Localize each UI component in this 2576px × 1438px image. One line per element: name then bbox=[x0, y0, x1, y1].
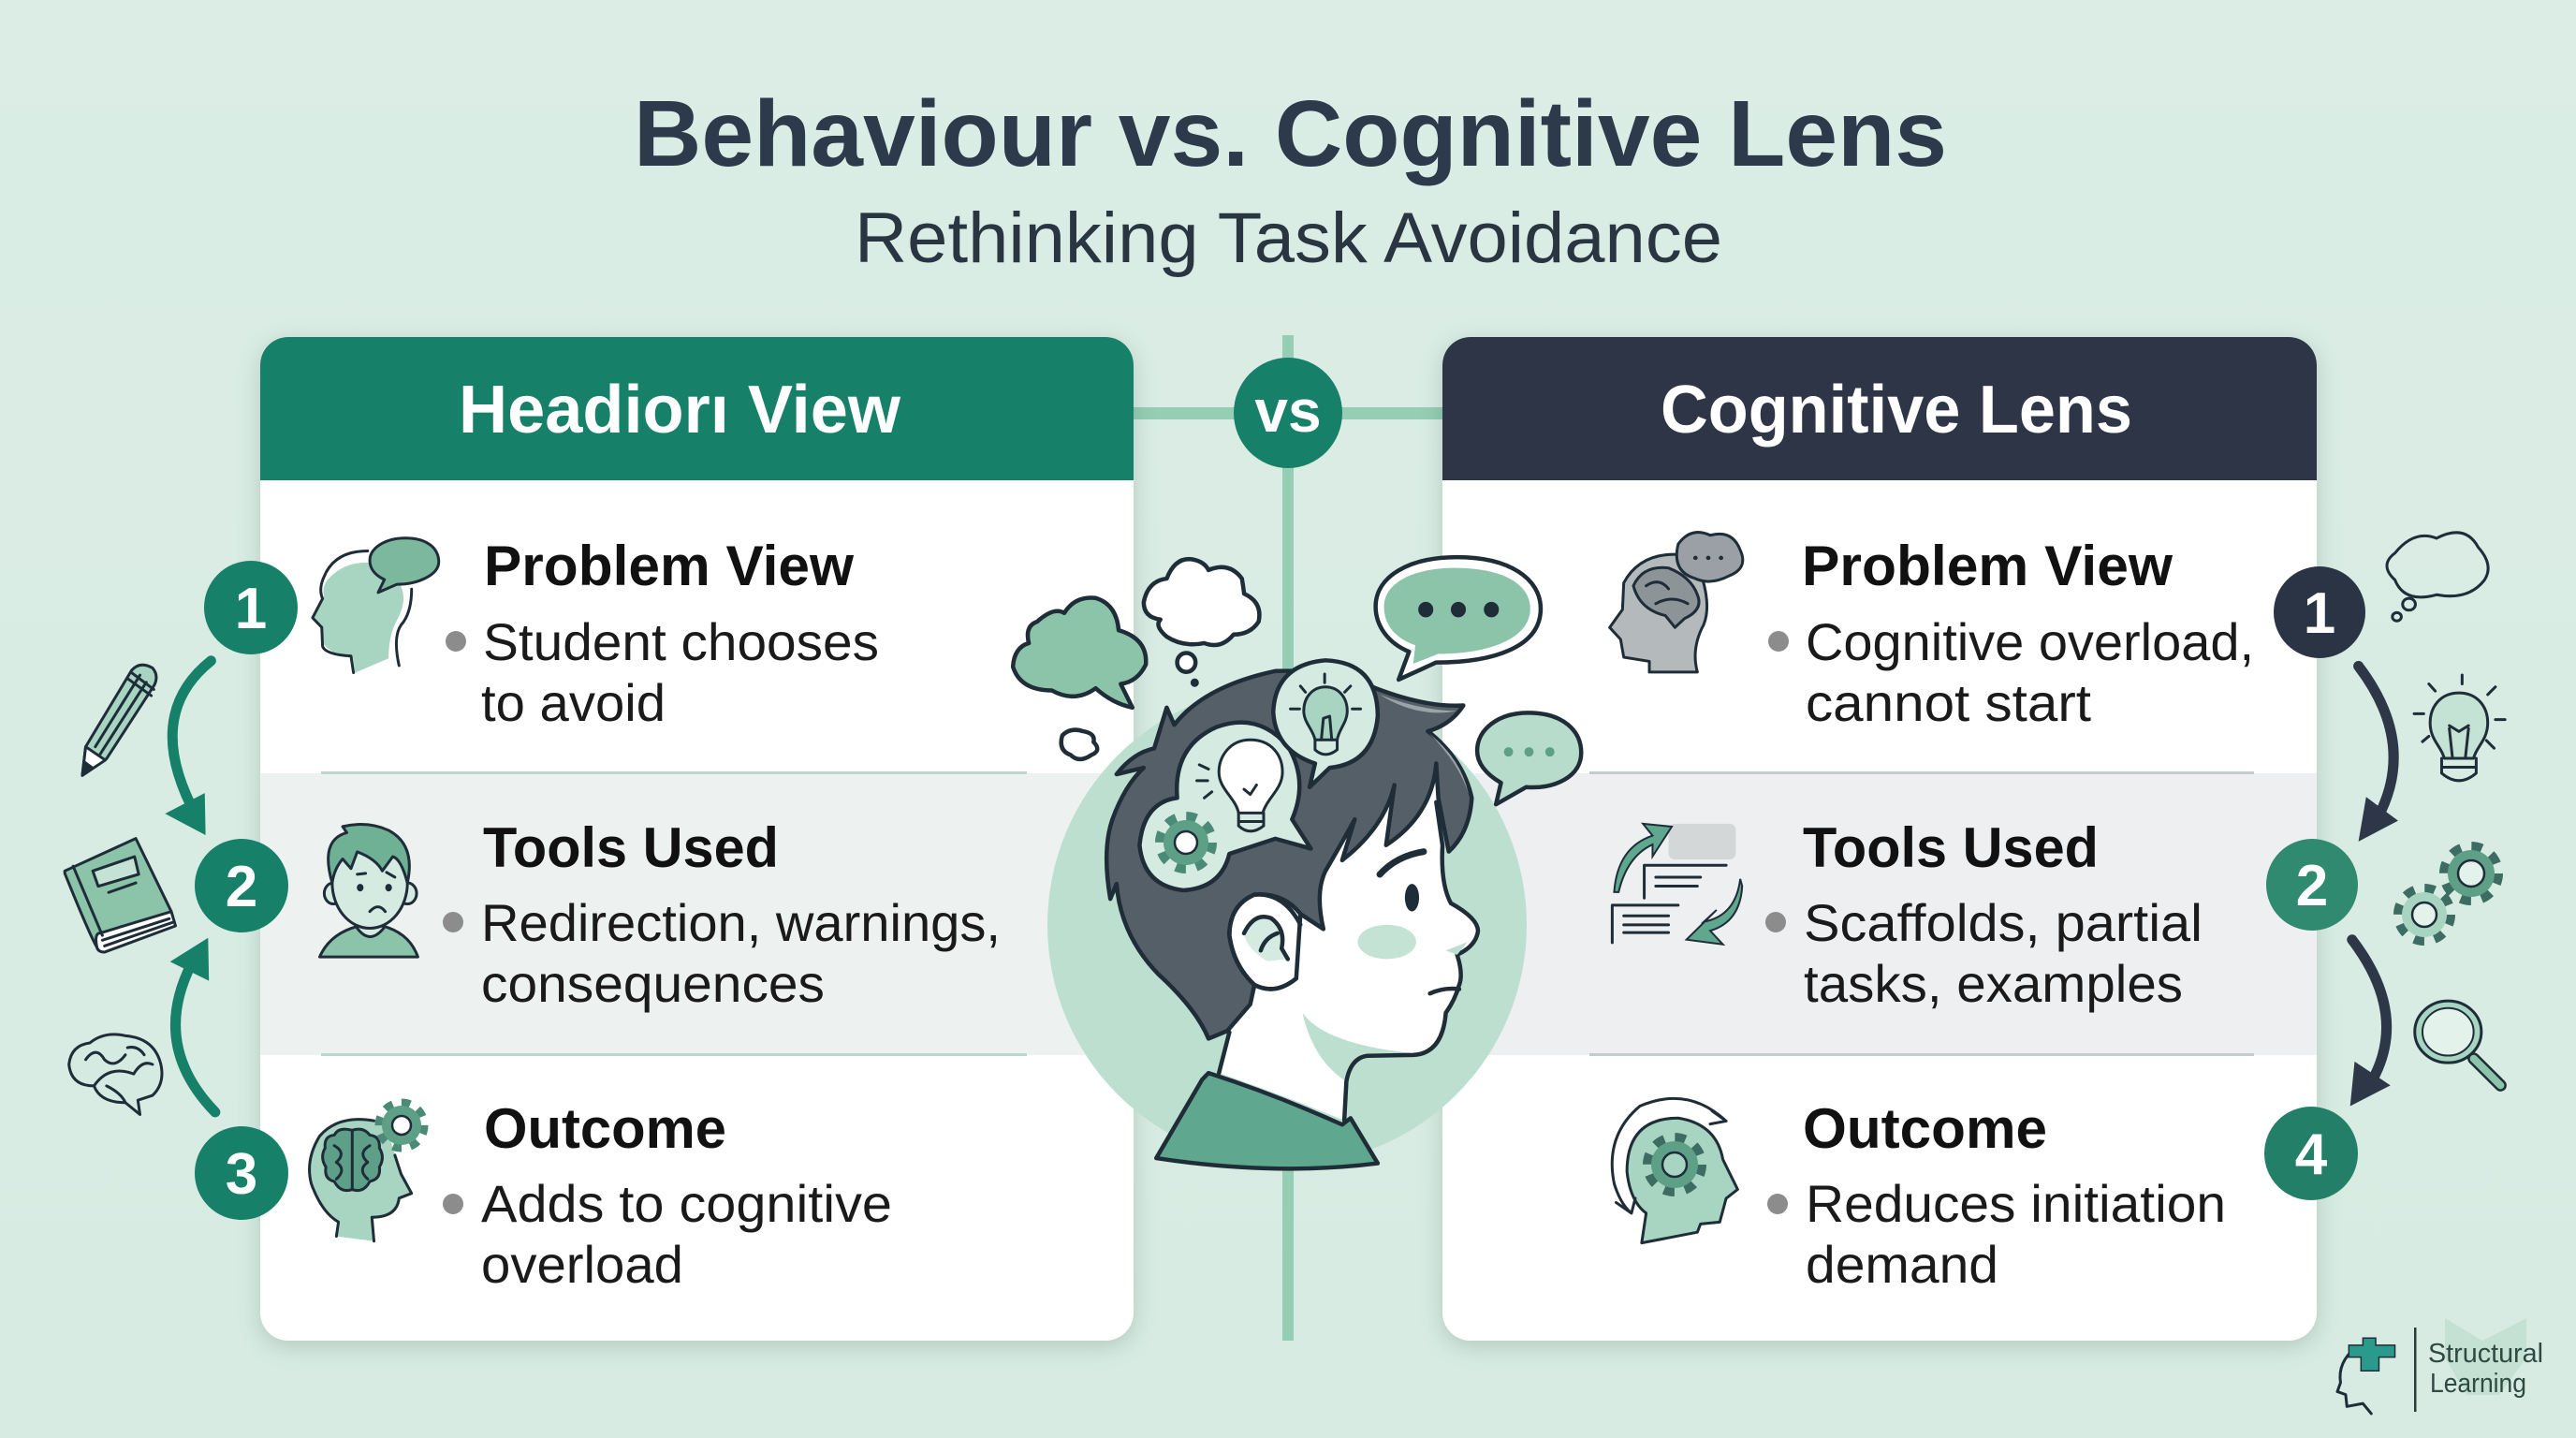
heading: Outcome bbox=[484, 1097, 726, 1160]
panel: cognitive lens bbox=[1442, 337, 2317, 1341]
head gear bbox=[1160, 816, 1212, 869]
logo wordmark: Learning bbox=[2430, 1369, 2526, 1399]
body text: Student chooses bbox=[483, 612, 879, 671]
body text: Scaffolds, partial bbox=[1804, 893, 2203, 952]
icon: scaffold documents bbox=[1612, 824, 1742, 945]
heading: Problem View bbox=[484, 535, 854, 597]
body text: tasks, examples bbox=[1804, 954, 2183, 1013]
number 3 bbox=[195, 1126, 288, 1220]
body text: Redirection, warnings, bbox=[481, 893, 1001, 952]
neck shadow bbox=[1302, 1013, 1417, 1081]
vs badge: vs bbox=[1254, 377, 1322, 445]
heading: Problem View bbox=[1802, 535, 2173, 597]
body text: Reduces initiation bbox=[1806, 1174, 2226, 1233]
body text: Cognitive overload, bbox=[1806, 612, 2254, 671]
heading: Tools Used bbox=[483, 816, 779, 879]
thought bubble with bulb and gear bbox=[1139, 723, 1310, 890]
ear bbox=[1229, 894, 1300, 989]
icon: pencil bbox=[82, 665, 156, 775]
header bar bbox=[1442, 337, 2317, 480]
number 1: 1 bbox=[2304, 581, 2335, 646]
icon: head with gear and cycle arrows bbox=[1612, 1098, 1737, 1243]
row: problem view bbox=[1768, 535, 2254, 732]
arrow: 1 to 2 bbox=[2359, 667, 2398, 842]
bullet bbox=[1767, 1194, 1788, 1214]
number 2 bbox=[2266, 839, 2358, 931]
header title: Cognitive Lens bbox=[1661, 373, 2132, 448]
number 2: 2 bbox=[226, 855, 257, 919]
icon: magnifier bbox=[2415, 1001, 2500, 1085]
arrow: 1 to 2 bbox=[165, 661, 211, 835]
icon: worried student bbox=[319, 825, 417, 957]
row dividers bbox=[321, 771, 1027, 1056]
body text bbox=[1806, 612, 2254, 732]
body text bbox=[481, 1174, 892, 1294]
face and neck bbox=[1219, 764, 1478, 1121]
row band: tools used bbox=[1442, 773, 2317, 1055]
body text: Adds to cognitive bbox=[481, 1174, 892, 1233]
mouth bbox=[1430, 989, 1459, 993]
number 1 bbox=[204, 561, 298, 654]
panel: behaviour view bbox=[260, 337, 1134, 1341]
panel background bbox=[260, 337, 1134, 1341]
row: outcome bbox=[1767, 1097, 2226, 1294]
body text: overload bbox=[481, 1235, 683, 1294]
header bar bbox=[260, 337, 1134, 480]
icon: light bulb bbox=[2414, 675, 2505, 781]
body text bbox=[481, 612, 879, 732]
logo icon bbox=[2337, 1338, 2395, 1414]
background circle bbox=[1047, 685, 1527, 1165]
hair highlights bbox=[1380, 695, 1469, 794]
heading: Outcome bbox=[1803, 1097, 2047, 1160]
number 1 bbox=[2274, 566, 2365, 658]
speech bubble: large bbox=[1376, 557, 1541, 680]
logo: structural learning bbox=[2337, 1318, 2543, 1414]
row: problem view bbox=[446, 535, 879, 732]
hair bbox=[1106, 671, 1471, 1038]
large bulb bbox=[1197, 740, 1282, 831]
body text bbox=[1804, 893, 2203, 1013]
cloud: green bbox=[1013, 597, 1146, 708]
heading: Tools Used bbox=[1803, 816, 2099, 879]
body text bbox=[481, 893, 1001, 1013]
icon: head with speech bubble bbox=[313, 538, 439, 673]
row dividers bbox=[1589, 771, 2254, 1056]
vs badge bbox=[1234, 358, 1342, 468]
row band: tools used bbox=[260, 773, 1134, 1055]
logo wordmark: Structural bbox=[2428, 1339, 2543, 1369]
body text: consequences bbox=[481, 954, 825, 1013]
bullet bbox=[1765, 912, 1786, 932]
logo wordmark bbox=[2428, 1339, 2543, 1399]
row: tools used bbox=[443, 816, 1001, 1013]
body text: to avoid bbox=[481, 673, 666, 732]
icon: head with brain bbox=[310, 1119, 412, 1241]
body text: cannot start bbox=[1806, 673, 2091, 732]
icon: book bbox=[65, 839, 175, 952]
centre connector lines bbox=[1134, 335, 1442, 1341]
face profile bbox=[1219, 802, 1478, 1121]
icon: gear on head bbox=[379, 1103, 424, 1148]
cloud: small bbox=[1061, 730, 1097, 759]
panel background bbox=[1442, 337, 2317, 1341]
speech bubble: small bbox=[1477, 712, 1581, 804]
bullet bbox=[443, 1194, 463, 1214]
number 3: 3 bbox=[226, 1142, 257, 1207]
row: outcome bbox=[443, 1097, 892, 1294]
thought dots bbox=[1178, 653, 1199, 687]
icon: gear in head bbox=[1647, 1137, 1702, 1192]
title: Behaviour vs. Cognitive Lens bbox=[634, 81, 1947, 186]
small bulb bbox=[1291, 674, 1361, 755]
number 4 bbox=[2264, 1107, 2358, 1200]
nose shadow bbox=[1446, 942, 1468, 955]
bullet bbox=[1768, 631, 1789, 652]
body text: demand bbox=[1806, 1235, 1998, 1294]
eyebrow bbox=[1380, 852, 1424, 874]
icon: brain outline bbox=[69, 1034, 162, 1115]
eye bbox=[1405, 884, 1419, 911]
bullet bbox=[443, 912, 463, 932]
cheek bbox=[1357, 925, 1416, 959]
bullet bbox=[446, 631, 466, 652]
header title: Headiorı View bbox=[459, 373, 901, 448]
body text bbox=[1806, 1174, 2226, 1294]
small thought bubble with bulb bbox=[1273, 660, 1378, 787]
arrow: 2 to 4 bbox=[2350, 940, 2391, 1107]
arrow: 3 to 2 bbox=[170, 938, 215, 1112]
icon: thought cloud bbox=[2387, 533, 2488, 621]
left process markers bbox=[65, 538, 439, 1241]
logo divider bbox=[2414, 1328, 2417, 1412]
shirt bbox=[1156, 1073, 1378, 1168]
central illustration: student head bbox=[1013, 557, 1581, 1168]
cloud: white bbox=[1144, 559, 1259, 645]
icon: lower gear bbox=[2398, 888, 2451, 941]
subtitle: Rethinking Task Avoidance bbox=[855, 198, 1722, 278]
number 2: 2 bbox=[2296, 854, 2328, 918]
logo watermark bbox=[2445, 1318, 2526, 1395]
row: tools used bbox=[1765, 816, 2203, 1013]
right process markers bbox=[1610, 533, 2505, 1243]
number 2 bbox=[195, 839, 288, 932]
icon: head with brain and cloud bbox=[1610, 533, 1743, 672]
icon: upper gear bbox=[2444, 846, 2498, 901]
number 1: 1 bbox=[235, 577, 267, 641]
number 4: 4 bbox=[2295, 1123, 2328, 1187]
